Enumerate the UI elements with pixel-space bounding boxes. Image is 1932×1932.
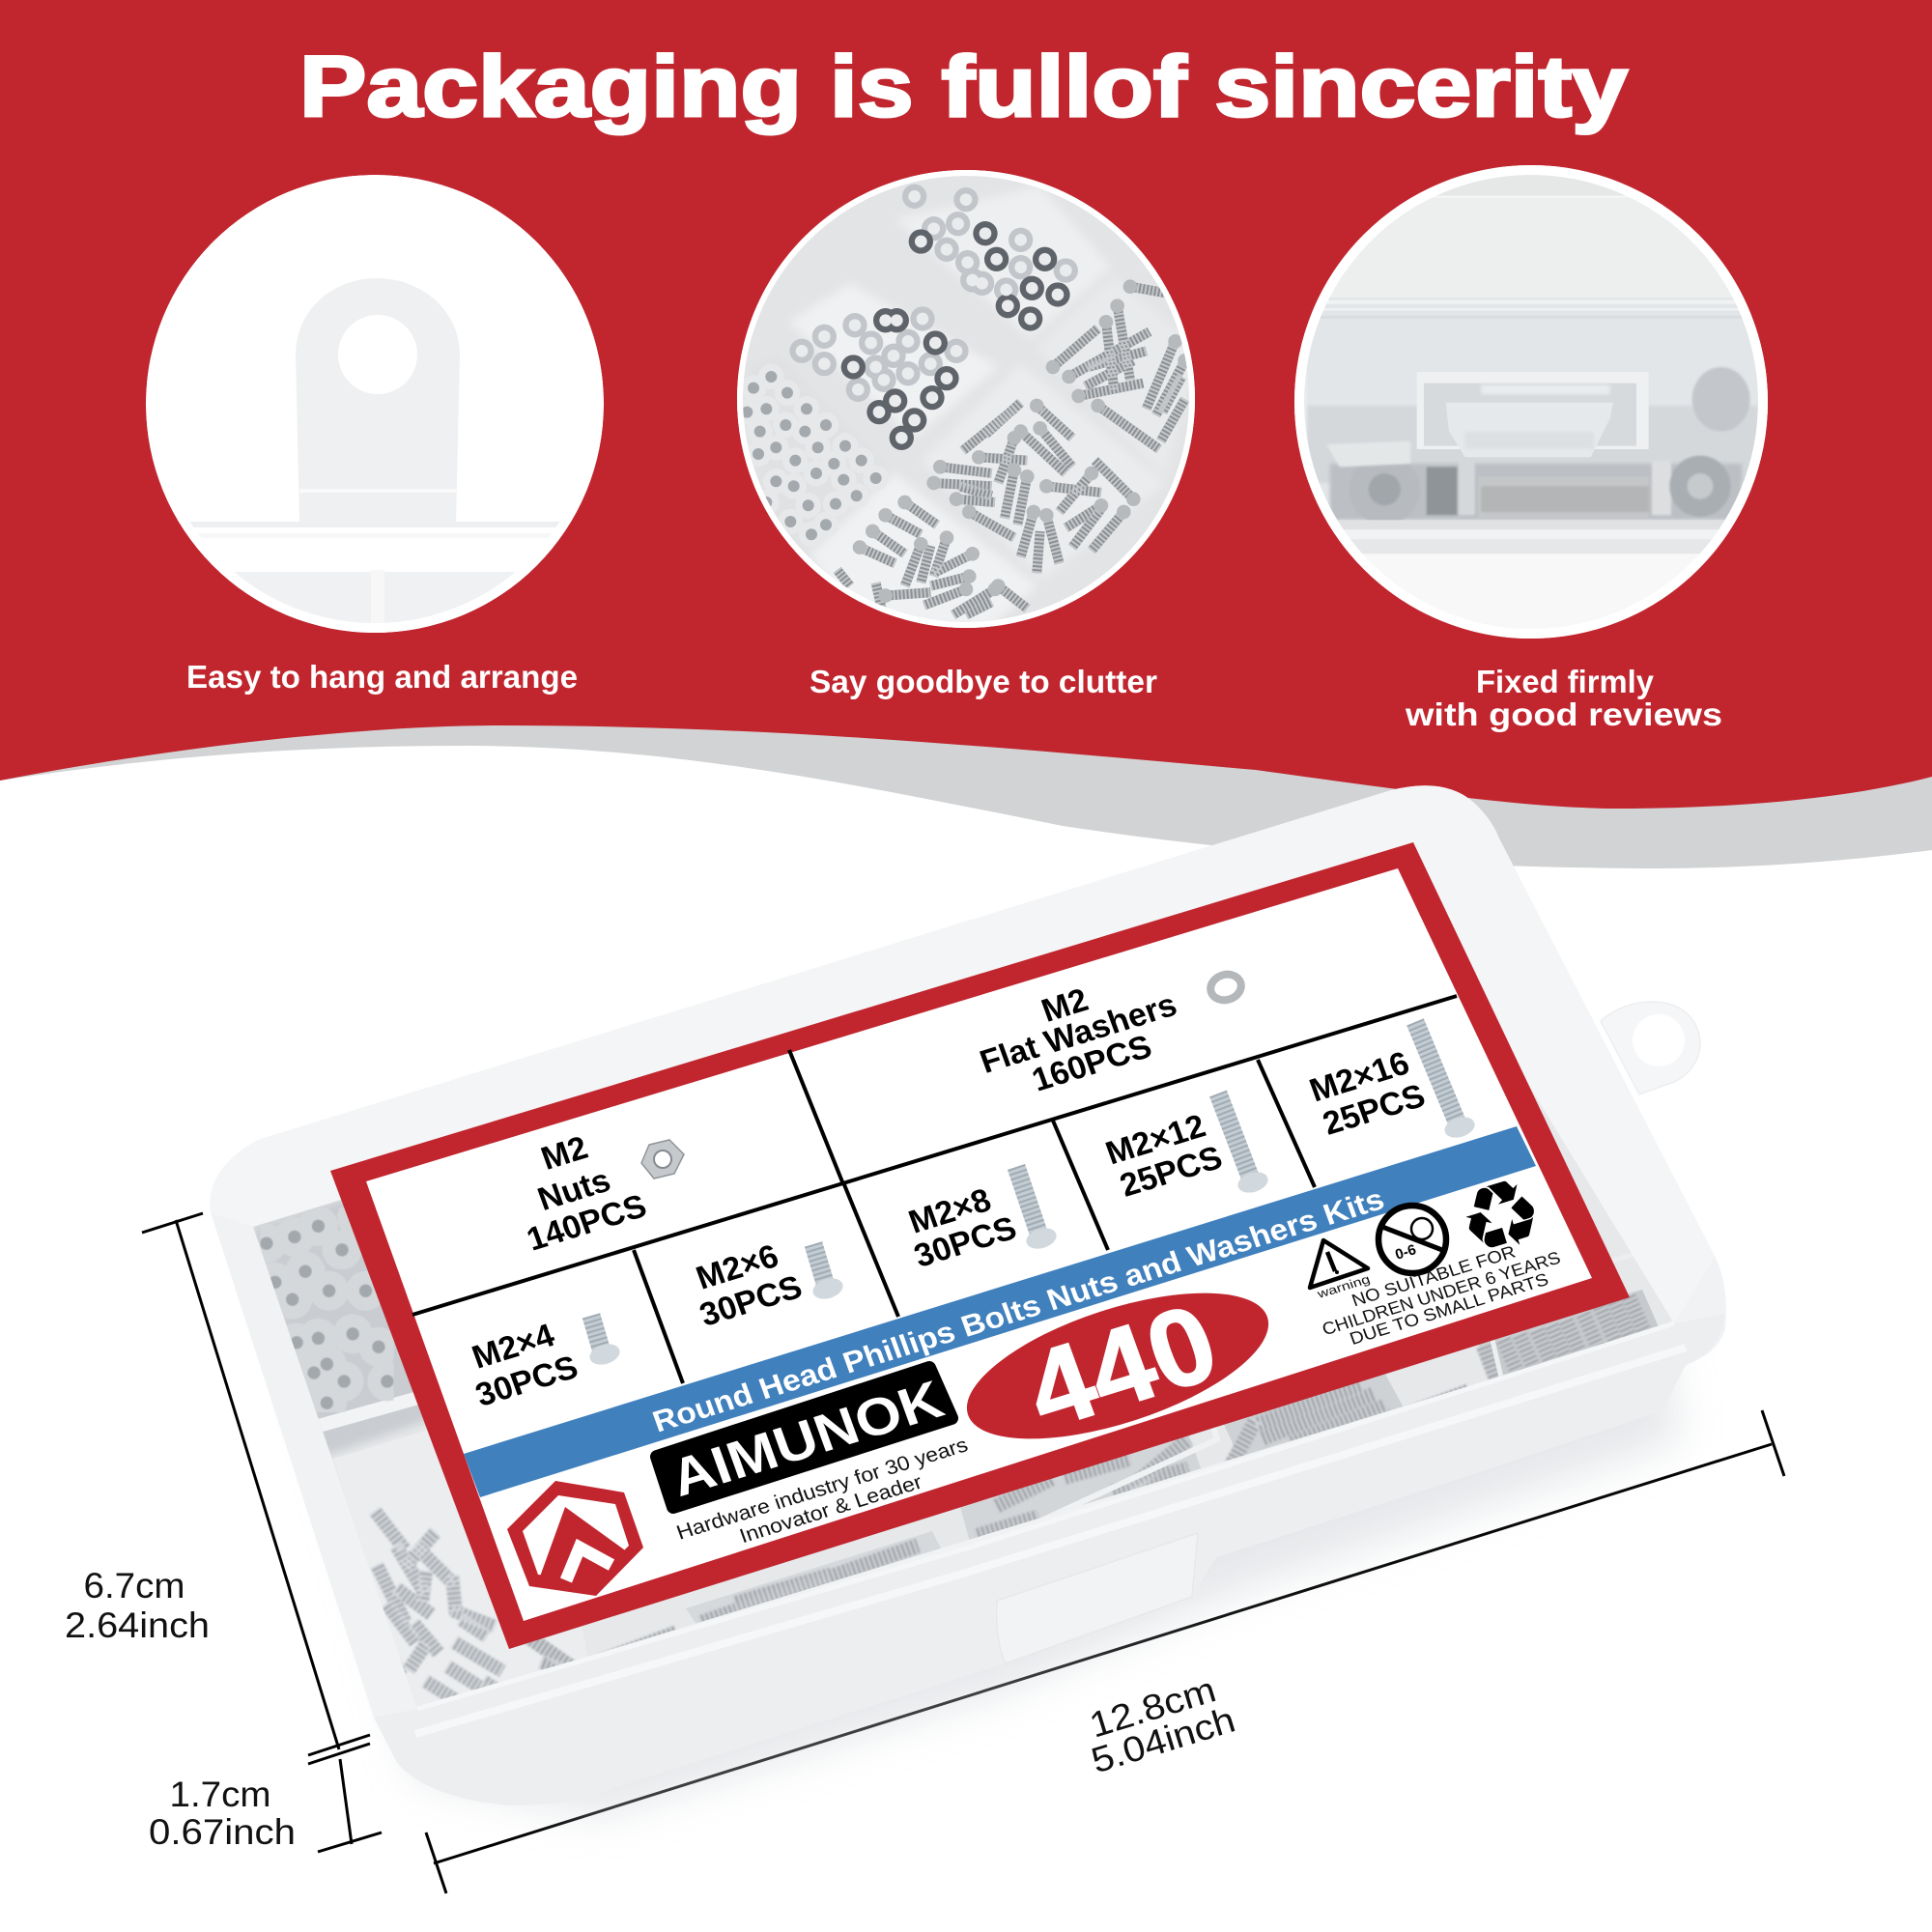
cell: M2 nuts: M2 [536,1129,592,1178]
caption: goodbye to clutter: Say goodbye to clutter [810,664,1157,699]
product label [330,842,1630,1649]
photo circle: hanging tab [145,175,609,659]
icon: recycling: ♻ [1445,1153,1556,1281]
dimension: length [1085,1669,1239,1780]
cell: M2 nuts: Nuts [533,1162,615,1218]
icon: not for age 0-6 [1378,1206,1446,1273]
cell: M2 nuts [522,1129,684,1258]
cell: M2 flat washers: M2 [1037,981,1093,1030]
warning text: NO SUITABLE FOR [1350,1242,1518,1310]
dimension lines [142,1213,1784,1893]
icon: not for age 0-6: 0-6 [1393,1241,1418,1264]
box latch [997,1533,1198,1663]
brand pill: AIMUNOK [663,1369,951,1508]
caption: hang and arrange: Easy to hang and arrange [186,659,578,695]
title: Packaging is fullof sincerity [299,38,1629,134]
blue banner [464,1126,1536,1497]
cell: M2x16 [1305,1022,1477,1143]
cell: M2x6: M2×6 [692,1237,783,1296]
storage box [210,785,1726,1816]
cell: M2x16: 25PCS [1318,1077,1430,1143]
dimension: height [149,1775,296,1852]
cell: M2x4: 30PCS [470,1349,582,1414]
dimension: width [65,1566,210,1645]
cell: M2x8: 30PCS [909,1209,1021,1275]
header background with wave [0,0,1932,868]
cell: M2x16: M2×16 [1305,1045,1414,1109]
photo circle: compartments with washers, nuts and screws [734,164,1198,628]
cell: M2x12: 25PCS [1115,1139,1227,1205]
440 badge: 440 [1010,1282,1233,1453]
cell: M2 flat washers [975,971,1244,1098]
icon: warning triangle [1310,1240,1372,1301]
cell: M2x6 [692,1237,845,1334]
caption: fixed firmly: Fixed firmly [1476,664,1655,699]
dimension: length: 12.8cm [1085,1669,1220,1746]
caption: fixed firmly [1405,664,1722,732]
photo circle: box latch close-up [1275,165,1777,639]
dimension: length: 5.04inch [1087,1700,1239,1780]
brand tagline: Innovator & Leader [737,1471,925,1548]
icon: warning triangle: warning [1315,1272,1372,1301]
440 badge [951,1264,1285,1468]
warning text: DUE TO SMALL PARTS [1347,1269,1551,1349]
label grid lines [412,996,1457,1383]
cell: M2x8 [904,1167,1059,1275]
brand logo [507,1481,643,1596]
brand tagline: Hardware industry for 30 years [673,1434,971,1545]
dimension: height: 0.67inch [149,1812,296,1852]
cell: M2 flat washers: Flat Washers [975,986,1181,1081]
caption: fixed firmly: with good reviews [1405,696,1722,732]
cell: M2 flat washers: 160PCS [1027,1028,1156,1098]
cell: M2x6: 30PCS [695,1268,807,1334]
warning text: CHILDREN UNDER 6 YEARS [1320,1248,1563,1339]
cell: M2x4: M2×4 [468,1317,559,1376]
dimension: width: 2.64inch [65,1605,210,1645]
blue banner: Round Head Phillips Bolts Nuts and Washers Kits [648,1181,1388,1438]
cell: M2x12: M2×12 [1101,1108,1210,1172]
dimension: height: 1.7cm [170,1775,270,1814]
cell: M2x4 [468,1316,622,1414]
dimension: width: 6.7cm [83,1566,185,1605]
cell: M2x8: M2×8 [904,1181,996,1240]
cell: M2 nuts: 140PCS [522,1187,651,1258]
cell: M2x12 [1101,1094,1270,1205]
